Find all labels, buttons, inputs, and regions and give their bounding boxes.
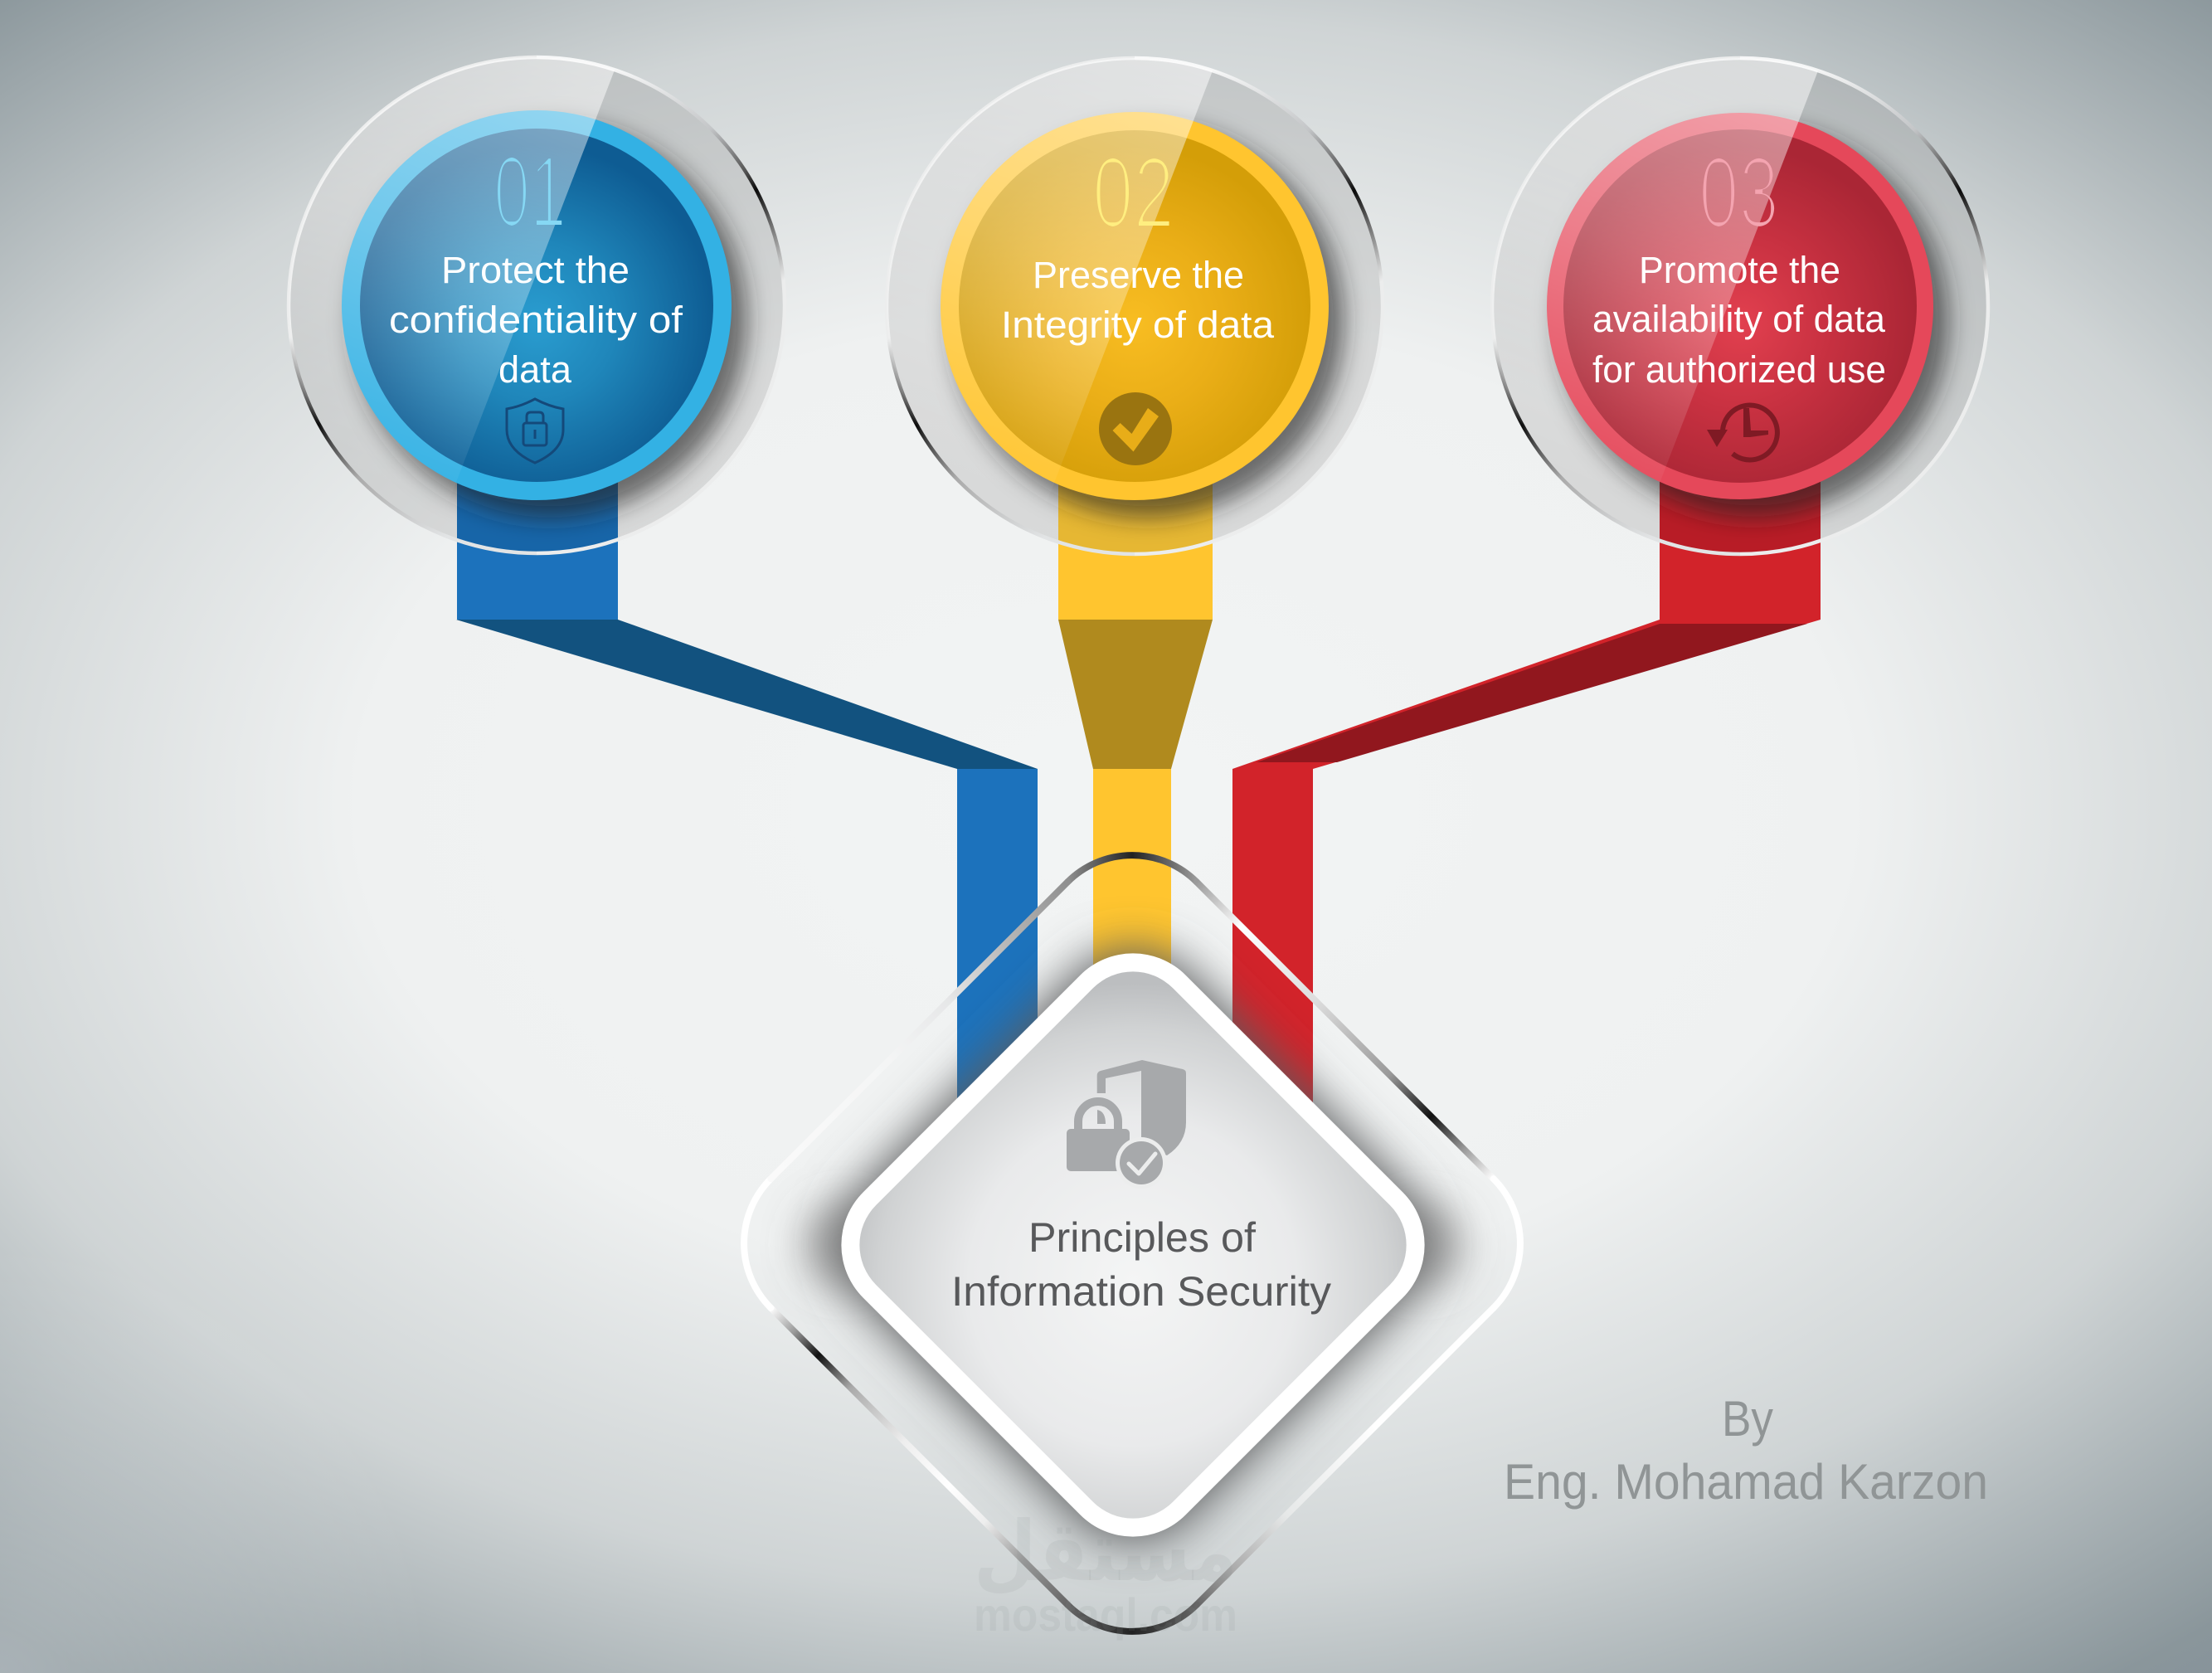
white diamond border (841, 953, 1425, 1537)
card text: for authorized use (1592, 348, 1886, 391)
card text: Preserve the (1033, 254, 1244, 296)
panel: centre diamond (841, 953, 1425, 1537)
inner disc (360, 129, 713, 482)
disc shadow (352, 123, 747, 518)
author credit (1504, 1391, 1988, 1510)
watermark: mostaql.com (974, 1588, 1237, 1641)
ribbon seen through glass (457, 483, 618, 552)
inner disc (959, 130, 1310, 482)
outer ring (941, 112, 1329, 500)
outer diamond frame (744, 855, 1520, 1632)
card text: Promote the (1639, 249, 1840, 291)
author credit: Eng. Mohamad Karzon (1504, 1454, 1988, 1510)
glass sheen (290, 57, 614, 481)
diamond face (859, 971, 1407, 1519)
number 02: 02 (1092, 136, 1174, 249)
diamond title: Information Security (951, 1268, 1331, 1315)
blue ribbon connector (456, 373, 1038, 1184)
diamond shadow (803, 953, 1463, 1537)
glass rim (289, 57, 785, 553)
glass sheen (853, 41, 1224, 571)
card text: data (498, 348, 572, 391)
glass rim (1492, 58, 1988, 554)
red ribbon connector (1232, 373, 1821, 1184)
ribbon seen through glass (1058, 484, 1213, 552)
icon: shield with lock (507, 399, 563, 463)
glass disc (289, 57, 785, 553)
yellow ribbon connector (1058, 373, 1213, 1018)
glass sheen (1458, 41, 1830, 571)
disc shadow (1558, 125, 1949, 517)
icon: check badge (1099, 392, 1172, 465)
number 03: 03 (1699, 136, 1779, 249)
glass disc (887, 58, 1383, 554)
ribbon seen through glass (1660, 389, 1821, 563)
icon: lock, shield and check (1067, 1060, 1186, 1189)
outer ring (342, 110, 732, 500)
card text (1001, 254, 1275, 346)
icon: clock with back arrow (1707, 405, 1777, 460)
card text: Protect the (441, 249, 630, 291)
glass disc (1492, 58, 1988, 554)
card text: availability of data (1592, 298, 1886, 340)
diamond title: Principles of (1028, 1214, 1256, 1261)
card text: Integrity of data (1001, 304, 1275, 346)
outer ring (1547, 113, 1933, 499)
diamond title (951, 1214, 1331, 1315)
panel: card 01 confidentiality (287, 55, 785, 556)
watermark: مستقل (974, 1503, 1237, 1600)
disc shadow (951, 124, 1344, 518)
panel: card 02 integrity (887, 56, 1382, 556)
number 01: 01 (493, 135, 566, 248)
inner disc (1563, 129, 1917, 483)
card text (389, 249, 683, 391)
author credit: By (1722, 1391, 1773, 1447)
glass rim (887, 58, 1383, 554)
watermark (974, 1503, 1237, 1641)
card text: confidentiality of (389, 299, 683, 341)
card text (1592, 249, 1886, 391)
panel: card 03 availability (1458, 41, 1988, 571)
